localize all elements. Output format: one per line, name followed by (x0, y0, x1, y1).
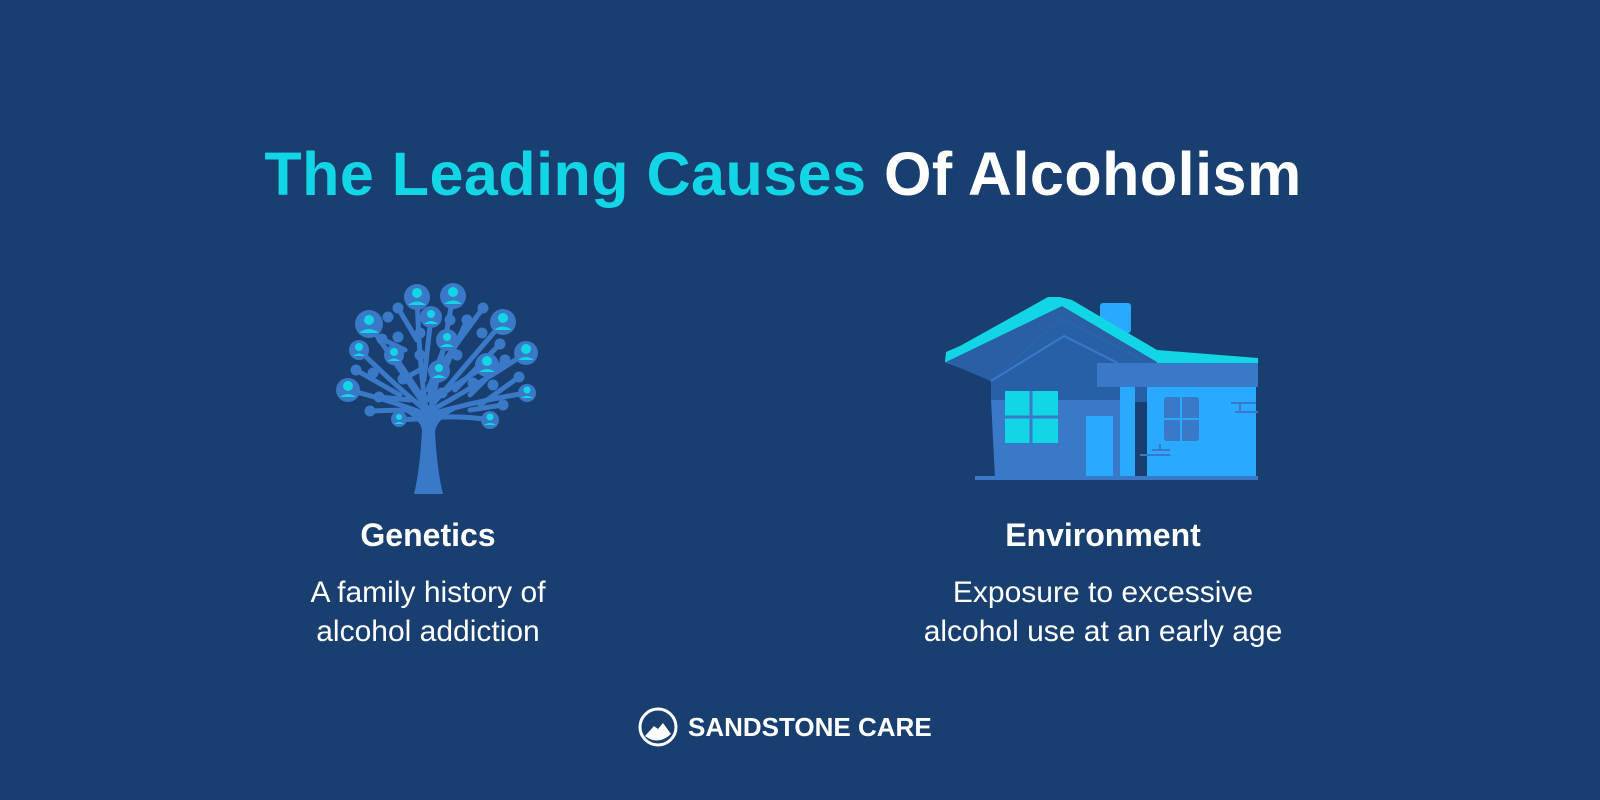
text: environment description: alcohol use at an early age (924, 615, 1282, 648)
heading: Environment: Environment (1005, 517, 1201, 553)
logo (638, 708, 932, 746)
text: genetics description (310, 576, 546, 648)
text: genetics description: alcohol addiction (316, 615, 540, 648)
icon: logo mark (638, 708, 678, 746)
logo text: SANDSTONE CARE (688, 712, 932, 742)
text: genetics description: A family history of (310, 576, 546, 609)
heading: Genetics: Genetics (360, 517, 496, 553)
title: The Leading Causes Of Alcoholism (264, 140, 1302, 208)
text: environment description (924, 576, 1282, 648)
text: environment description: Exposure to excessive (953, 576, 1253, 609)
